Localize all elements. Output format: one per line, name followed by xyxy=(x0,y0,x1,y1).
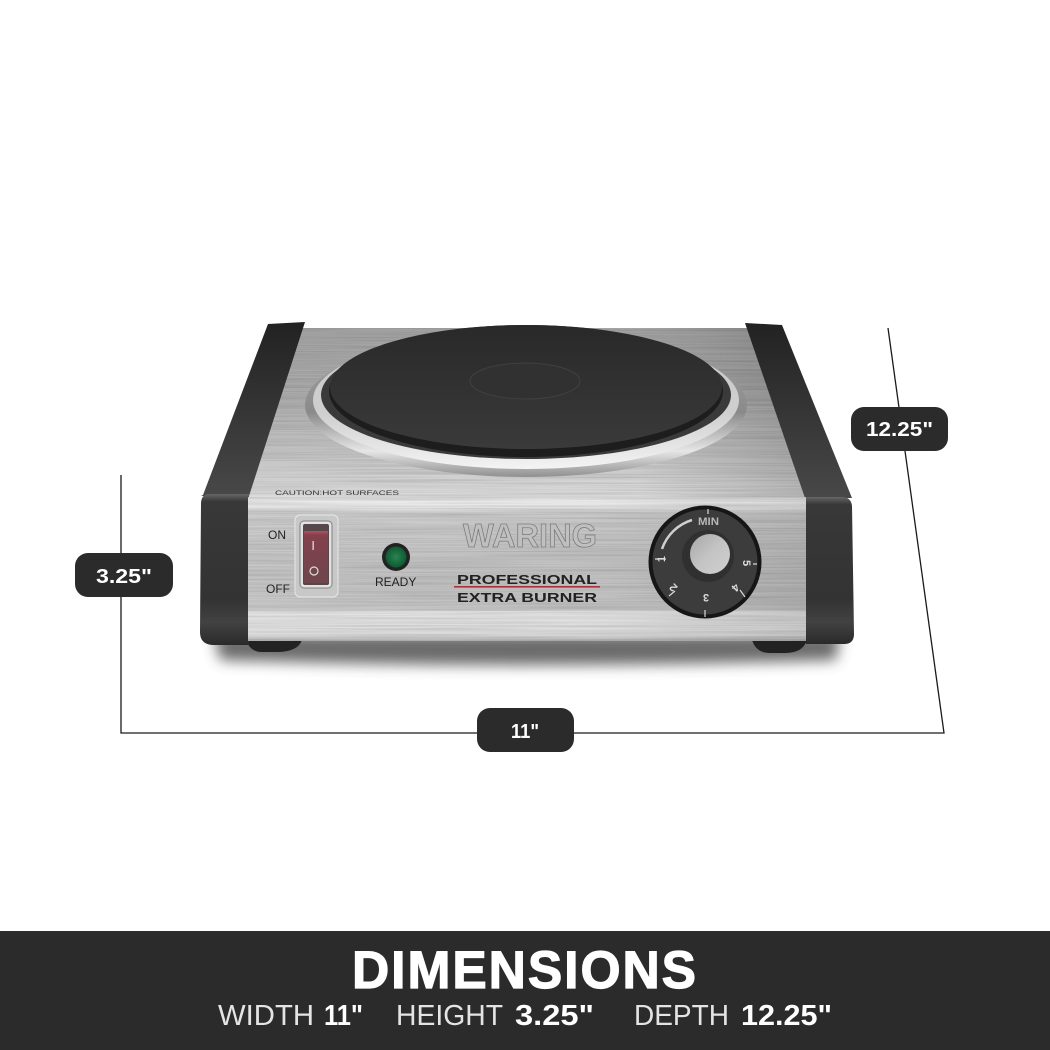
steel ring xyxy=(305,333,747,477)
height spec: HEIGHT xyxy=(396,1000,503,1032)
knob numbers: 2 xyxy=(667,581,680,594)
width spec: 11" xyxy=(324,1000,363,1032)
depth pill xyxy=(851,407,948,451)
knob ticks xyxy=(655,509,757,617)
width spec xyxy=(218,1000,363,1032)
ready indicator light xyxy=(382,543,410,571)
top steel plate xyxy=(245,328,808,500)
hot plate xyxy=(329,325,723,457)
left black side rail xyxy=(201,322,305,496)
professional label: PROFESSIONAL xyxy=(457,573,598,587)
depth spec: 12.25" xyxy=(741,1000,832,1032)
dimension lines xyxy=(121,328,944,733)
width pill: 11" xyxy=(511,721,539,743)
height spec: 3.25" xyxy=(515,1000,594,1032)
front steel panel xyxy=(248,497,806,641)
product: electric burner xyxy=(200,322,854,665)
width spec: WIDTH xyxy=(218,1000,314,1032)
red rule xyxy=(454,586,600,588)
height pill: 3.25" xyxy=(96,566,152,588)
ready label: READY xyxy=(375,575,416,589)
temperature knob xyxy=(648,506,762,618)
rubber feet xyxy=(246,640,807,653)
knob numbers: 4 xyxy=(728,581,742,594)
depth spec xyxy=(634,1000,832,1032)
height spec xyxy=(396,1000,594,1032)
rocker switch xyxy=(295,515,338,597)
right black end cap xyxy=(805,497,854,644)
knob numbers: 5 xyxy=(740,560,752,566)
shadow under burner xyxy=(214,634,840,665)
right black side rail xyxy=(745,323,852,498)
centre disc xyxy=(470,363,580,399)
waring logo: WARING xyxy=(463,517,597,554)
caution text: CAUTION:HOT SURFACES xyxy=(275,490,399,497)
extra burner label: EXTRA BURNER xyxy=(457,591,597,605)
depth spec: DEPTH xyxy=(634,1000,729,1032)
left black end cap xyxy=(200,494,249,645)
height pill xyxy=(75,553,173,597)
on label: ON xyxy=(268,528,286,542)
knob numbers xyxy=(656,556,752,603)
knob cap xyxy=(690,534,730,574)
depth pill: 12.25" xyxy=(866,419,933,441)
knob hub xyxy=(682,530,734,582)
footer band xyxy=(0,931,1050,1050)
knob numbers: 1 xyxy=(656,556,668,562)
min label: MIN xyxy=(698,516,719,528)
knob arc xyxy=(662,520,692,549)
burner ring and hot plate xyxy=(305,325,747,477)
width pill xyxy=(477,708,574,752)
heading: DIMENSIONS xyxy=(352,941,698,1000)
knob numbers: 3 xyxy=(703,591,709,603)
off label: OFF xyxy=(266,582,290,596)
